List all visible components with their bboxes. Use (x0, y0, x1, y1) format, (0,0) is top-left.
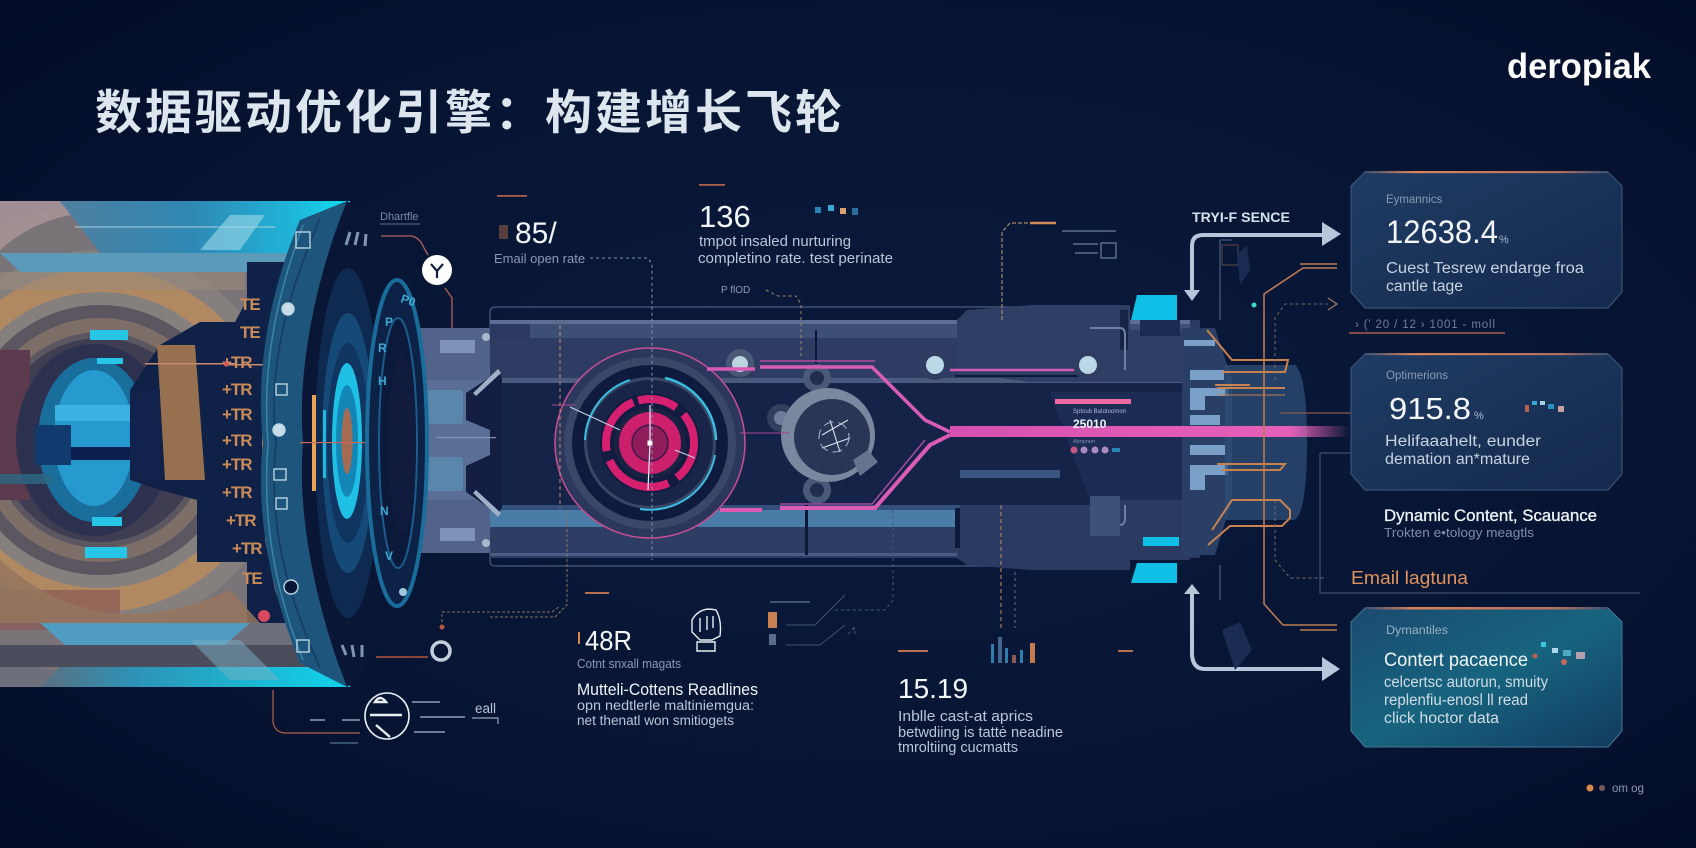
small right-side ticks (768, 595, 845, 645)
disc lettering (378, 292, 418, 563)
big target dial (555, 348, 745, 538)
disc lettering: V (385, 549, 393, 563)
arrow: bottom feedback (1184, 584, 1340, 681)
panel: content sequence: Contert pacaence (1384, 650, 1528, 671)
central engine cylinder (367, 280, 1350, 606)
metric: multi-content headlines: Cotnt snxall magats (577, 657, 681, 671)
label: Dhartfle callout (380, 211, 452, 328)
orange pixel rows: TE (242, 569, 262, 588)
panel: optimerions metric: demation an*mature (1385, 451, 1530, 468)
date strip: › (' 20 / 12 › 1001 - moll (1355, 319, 1495, 331)
panel: content sequence: Dymantiles (1386, 625, 1448, 637)
logo: deropiak (1507, 47, 1652, 86)
metric: 15.19: betwdiing is tattė neadine (898, 725, 1063, 741)
disc lettering: P (385, 315, 393, 329)
arrow: top feedback (1184, 222, 1341, 301)
orange pixel rows: +TR (222, 431, 252, 450)
orange pixel rows: +TR (232, 539, 262, 558)
disc lettering: P0 (399, 292, 418, 309)
main pink beam (950, 426, 1350, 437)
ring gear (1182, 328, 1232, 555)
pink data pipes (552, 361, 1074, 510)
panel: optimerions metric (1351, 353, 1622, 490)
panel: content sequence: click hoctor data (1384, 710, 1499, 727)
metric: 15.19: tmroltiing cucmatts (898, 740, 1018, 756)
orange brackets (1207, 330, 1290, 545)
cylinder shell (490, 320, 1200, 558)
label: Dhartfle callout: Dhartfle (380, 211, 419, 223)
callout lines top (560, 223, 1116, 560)
panel: optimerions metric: Helifaaahelt, eunder (1385, 433, 1541, 450)
connection plate behind disc (415, 328, 495, 553)
metric: email open rate: 85/ (515, 217, 557, 250)
engine outline frame (490, 307, 1070, 566)
curved drum band (261, 201, 347, 687)
outer drum text ticks (342, 232, 366, 657)
metric: email open rate: Email open rate (494, 251, 585, 266)
disc lettering: N (380, 504, 389, 518)
band icons (258, 232, 310, 652)
panel: dynamics metric: Eymannics (1386, 194, 1442, 206)
adapter panels (420, 333, 502, 547)
disc rings (315, 268, 381, 618)
translucent rear housing (1225, 365, 1307, 520)
text block: dynamic content sequence (1384, 507, 1597, 540)
metric: nurturing: completino rate. test perinate (698, 251, 893, 267)
metric: multi-content headlines: Mutteli-Cottens Readlines (577, 681, 758, 699)
label: try sense: TRYI-F SENCE (1192, 209, 1290, 225)
metric: nurturing: P flOD (721, 285, 750, 296)
status display: 25010 (1073, 417, 1107, 431)
orange pixel rows: TE (240, 323, 260, 342)
small gear dial (767, 364, 878, 504)
orange pixel rows: +TR (222, 455, 252, 474)
orange pixel rows: +TR (222, 353, 252, 372)
orange pixel rows (222, 295, 262, 588)
icon: Y node (422, 255, 452, 285)
panel: optimerions metric: Optimerions (1386, 370, 1448, 382)
disc lettering: H (378, 374, 387, 388)
connector lines right (1220, 240, 1640, 630)
second disc over adapter (367, 280, 427, 606)
metric: multi-content headlines: net thenatl won smitiogets (577, 713, 734, 728)
metric: nurturing: tmpot insaled nurturing (699, 234, 851, 250)
metric: nurturing: 136 (699, 199, 751, 234)
icon: face and email tag: eall (475, 701, 496, 716)
status display: Abnpnon (1073, 439, 1095, 445)
icon: ring node (376, 510, 567, 660)
text block: dynamic content sequence: Trokten e•tology meagtls (1384, 526, 1534, 540)
metric: 15.19 (898, 650, 1133, 756)
footer marker (1586, 783, 1644, 795)
left data drum (0, 201, 495, 687)
panel: dynamics metric (1351, 171, 1622, 308)
orange pixel rows: +TR (222, 483, 252, 502)
status display: Sptoub Batotoomon (1073, 409, 1126, 415)
metric: multi-content headlines (577, 592, 758, 728)
heading: email language: Email lagtuna (1351, 568, 1469, 588)
icon: hand (692, 609, 720, 651)
status display (1055, 399, 1131, 454)
icon: face and email tag (273, 690, 498, 744)
drum body layers (0, 201, 350, 687)
metric: multi-content headlines: 48R (585, 625, 632, 656)
dark drum face (302, 201, 395, 687)
metric: email open rate (494, 195, 585, 266)
orange pixel rows: +TR (226, 511, 256, 530)
panel: content sequence: replenfiu-enosl ll read (1384, 692, 1528, 709)
text block: dynamic content sequence: Dynamic Content, Scauance (1384, 507, 1597, 525)
knobs (726, 349, 1103, 380)
orange pixel rows: +TR (222, 405, 252, 424)
metric: 15.19: 15.19 (898, 673, 968, 704)
orange pixel rows: +TR (222, 380, 252, 399)
panel: dynamics metric: 12638.4 (1386, 214, 1498, 250)
metric: nurturing (698, 184, 893, 296)
title: 数据驱动优化引擎：构建增长飞轮 (95, 86, 845, 139)
panel: content sequence (1351, 607, 1622, 747)
cyan vents (1131, 295, 1179, 583)
panel: content sequence: celcertsc autorun, smuity (1384, 674, 1548, 691)
shadow plates (1222, 245, 1252, 670)
panel: dynamics metric: Cuest Tesrew endarge froa (1386, 260, 1584, 277)
panel: dynamics metric: % (1499, 234, 1509, 246)
mini bar chart (835, 505, 1035, 663)
metric: 15.19: Inblle cast-at aprics (898, 709, 1033, 725)
metric: multi-content headlines: opn nedtlerle maltiniemgua: (577, 698, 754, 713)
indicator dot (1252, 302, 1256, 308)
panel: optimerions metric: % (1474, 410, 1484, 422)
panel: dynamics metric: cantle tage (1386, 278, 1463, 295)
disc lettering: R (378, 341, 387, 355)
orange pixel rows: TE (240, 295, 260, 314)
panel: optimerions metric: 915.8 (1389, 391, 1471, 426)
footer marker: om og (1612, 783, 1644, 795)
